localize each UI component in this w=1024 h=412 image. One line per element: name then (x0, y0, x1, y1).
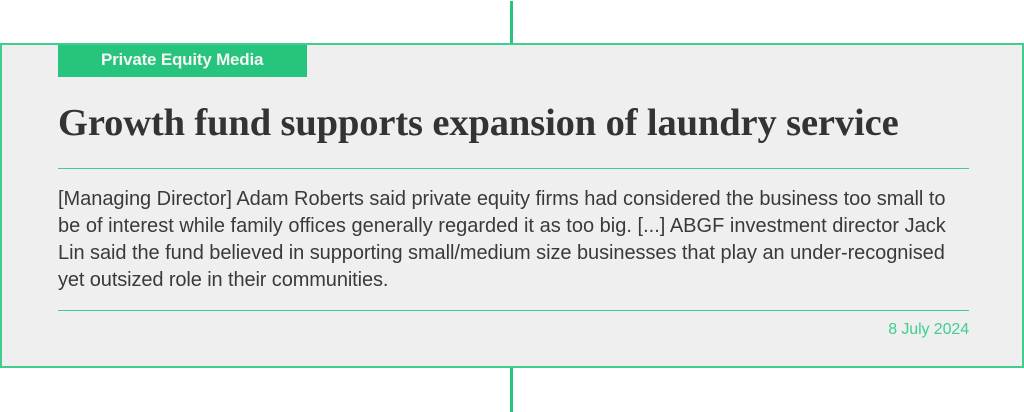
quote text block (58, 188, 946, 291)
quote text block: Lin said the fund believed in supporting small/medium size businesses that play an under-recognised (58, 242, 945, 264)
quote text block: [Managing Director] Adam Roberts said private equity firms had considered the business too small to (58, 188, 945, 210)
quote text block: be of interest while family offices generally regarded it as too big. [...] ABGF investment director Jack (58, 215, 946, 237)
divider top (58, 168, 969, 169)
quote text block: yet outsized role in their communities. (58, 269, 388, 291)
connector line bottom (510, 367, 513, 412)
divider bottom (58, 310, 969, 311)
date: 8 July 2024 (888, 321, 969, 338)
heading: Growth fund supports expansion of laundry service (58, 102, 899, 144)
panel: quote card (0, 43, 1024, 368)
source tag: Private Equity Media (101, 50, 263, 69)
connector line top (510, 1, 513, 44)
source tag (58, 45, 307, 77)
